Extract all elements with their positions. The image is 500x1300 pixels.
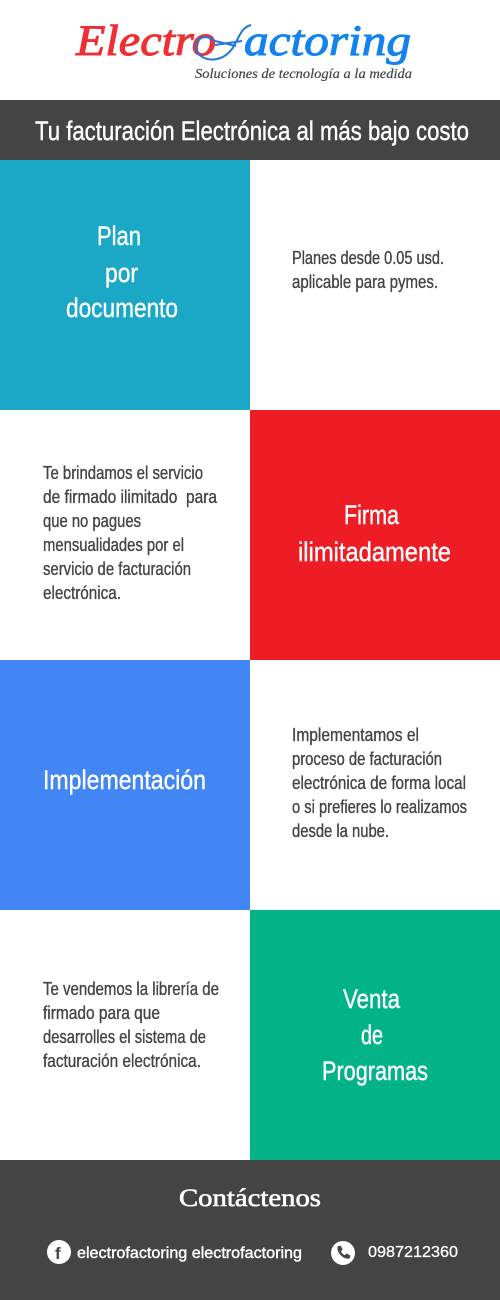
panel: venta de programas: de <box>361 1020 383 1050</box>
text block: firmado ilimitado: electrónica. <box>43 583 121 603</box>
text block: planes <box>250 160 500 410</box>
logo: Soluciones de tecnología a la medida <box>195 67 412 82</box>
panel: plan por documento: por <box>105 258 138 288</box>
text block: firmado ilimitado <box>0 410 250 660</box>
panel: venta de programas: Venta <box>343 984 401 1014</box>
panel: firma ilimitadamente: Firma <box>344 500 400 530</box>
panel: plan por documento: documento <box>66 293 178 323</box>
text block: implementamos: o si prefieres lo realizamos <box>292 797 467 817</box>
text block: planes: Planes desde 0.05 usd. <box>292 248 444 268</box>
logo: Electro <box>75 18 216 65</box>
text block: librería: desarrolles el sistema de <box>43 1027 206 1047</box>
logo: actoring <box>244 18 411 65</box>
text block: firmado ilimitado: servicio de facturación <box>43 559 191 579</box>
text block: implementamos: desde la nube. <box>292 821 389 841</box>
icon: facebook <box>47 1240 71 1264</box>
footer heading: Contáctenos <box>179 1185 321 1212</box>
text block: implementamos: Implementamos el <box>292 725 419 745</box>
text block: librería: Te vendemos la librería de <box>43 979 219 999</box>
text block: implementamos: electrónica de forma local <box>292 773 466 793</box>
footer <box>0 1160 500 1300</box>
text block: firmado ilimitado: que no pagues <box>43 511 141 531</box>
text block: firmado ilimitado: mensualidades por el <box>43 535 184 555</box>
panel: implementación: Implementación <box>43 765 206 795</box>
panel: plan por documento: Plan <box>97 221 141 251</box>
text block: firmado ilimitado: de firmado ilimitado para <box>43 487 218 507</box>
title band <box>0 100 500 160</box>
icon: facebook: f <box>55 1244 61 1263</box>
phone number: 0987212360 <box>368 1244 458 1261</box>
facebook handle: electrofactoring electrofactoring <box>77 1245 302 1262</box>
text block: implementamos <box>250 660 500 910</box>
text block: implementamos: proceso de facturación <box>292 749 442 769</box>
panel: firma ilimitadamente: ilimitadamente <box>298 537 451 567</box>
text block: firmado ilimitado: Te brindamos el servicio <box>43 463 203 483</box>
text block: librería: facturación electrónica. <box>43 1051 201 1071</box>
icon: phone <box>331 1241 355 1265</box>
panel: venta de programas <box>250 910 500 1160</box>
text block: librería: firmado para que <box>43 1003 160 1023</box>
panel: firma ilimitadamente <box>250 410 500 660</box>
panel: plan por documento <box>0 160 250 410</box>
text block: planes: aplicable para pymes. <box>292 272 438 292</box>
text block: librería <box>0 910 250 1160</box>
logo <box>0 0 500 100</box>
panel: venta de programas: Programas <box>322 1056 428 1086</box>
panel: implementación <box>0 660 250 910</box>
